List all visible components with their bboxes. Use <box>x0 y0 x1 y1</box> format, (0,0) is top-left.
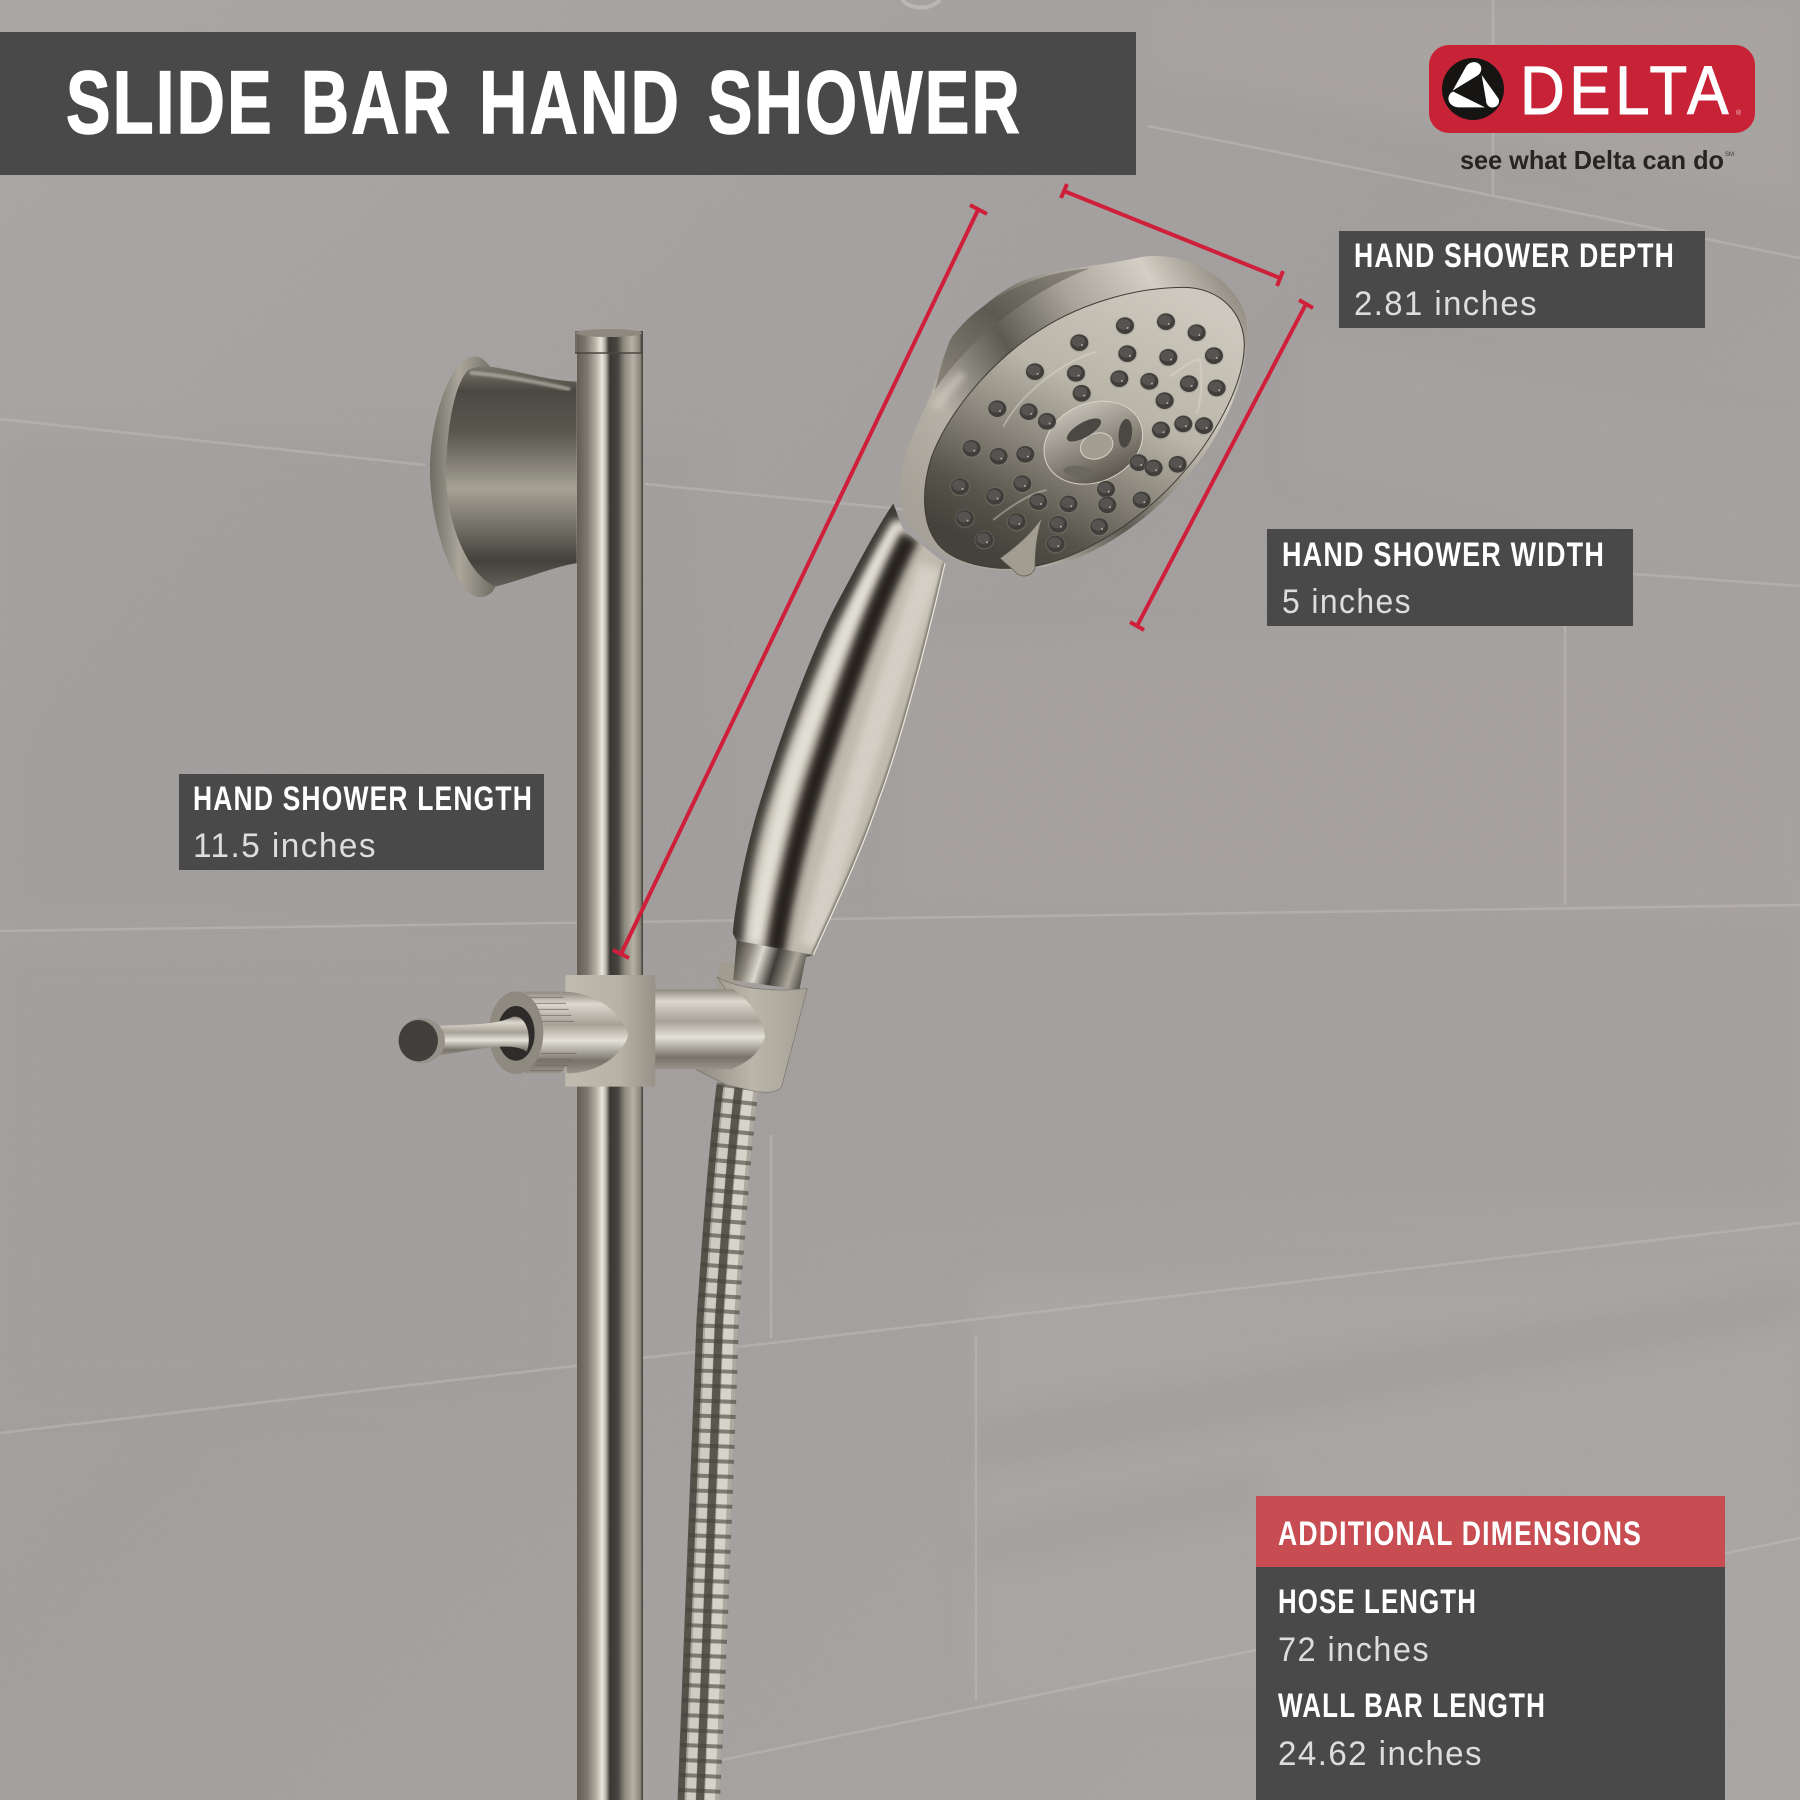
lever end cap <box>398 1018 445 1063</box>
title banner <box>0 32 1136 175</box>
spray selector tab <box>1000 517 1043 576</box>
flexible metal hose <box>681 1085 749 1800</box>
head spray face <box>925 287 1244 568</box>
hand shower head <box>900 256 1247 576</box>
head rim <box>900 256 1247 570</box>
raised face ribs <box>993 352 1201 520</box>
knob face ring <box>489 991 543 1074</box>
callout: hand shower depth <box>1339 231 1705 328</box>
callout: hand shower depth: 2.81 inches <box>1354 285 1538 323</box>
rim highlight <box>935 373 963 408</box>
wall mount bracket <box>430 357 577 597</box>
panel: additional dimensions <box>1256 1496 1725 1800</box>
callout: hand shower length: HAND SHOWER LENGTH <box>193 780 533 818</box>
center spray medallion <box>1031 386 1156 499</box>
handle body <box>732 504 944 954</box>
slider block <box>565 975 655 1087</box>
callout: hand shower length: 11.5 inches <box>193 827 377 865</box>
panel body: WALL BAR LENGTH <box>1278 1687 1546 1725</box>
sliding bracket assembly <box>398 975 807 1092</box>
callout: hand shower width <box>1267 529 1633 626</box>
callout: hand shower width: HAND SHOWER WIDTH <box>1282 536 1605 574</box>
title banner: SLIDE BAR HAND SHOWER <box>66 52 1022 152</box>
panel body <box>1256 1567 1725 1800</box>
dimension line: hand shower length <box>613 205 987 958</box>
Delta logo and tagline: ® <box>1736 109 1742 117</box>
handle neck <box>733 941 813 990</box>
panel body: 24.62 inches <box>1278 1735 1483 1773</box>
Delta logo and tagline: see what Delta can do <box>1460 145 1724 175</box>
spray nozzles <box>950 313 1227 554</box>
horizontal arm <box>655 989 765 1069</box>
hand shower handle <box>717 497 960 990</box>
dimension line: hand shower width <box>1130 300 1313 630</box>
holder back lip <box>717 962 740 990</box>
slide bar <box>575 329 643 1800</box>
back shell <box>935 268 1090 390</box>
panel body: HOSE LENGTH <box>1278 1583 1477 1621</box>
hand shower holder <box>697 977 807 1092</box>
Delta logo and tagline <box>1429 45 1755 175</box>
Delta logo and tagline: DELTA <box>1520 52 1733 129</box>
top fixture fragment <box>902 0 940 8</box>
knob collar <box>562 992 628 1073</box>
dimension line: hand shower depth <box>1061 184 1283 286</box>
panel body: 72 inches <box>1278 1631 1430 1669</box>
panel header <box>1256 1496 1725 1567</box>
panel header: ADDITIONAL DIMENSIONS <box>1278 1515 1642 1553</box>
lever handle <box>437 1017 529 1056</box>
Delta logo and tagline: SM <box>1725 152 1734 158</box>
callout: hand shower width: 5 inches <box>1282 583 1412 621</box>
knurled adjustment ring <box>523 992 579 1073</box>
callout: hand shower length <box>179 774 544 870</box>
callout: hand shower depth: HAND SHOWER DEPTH <box>1354 237 1675 275</box>
